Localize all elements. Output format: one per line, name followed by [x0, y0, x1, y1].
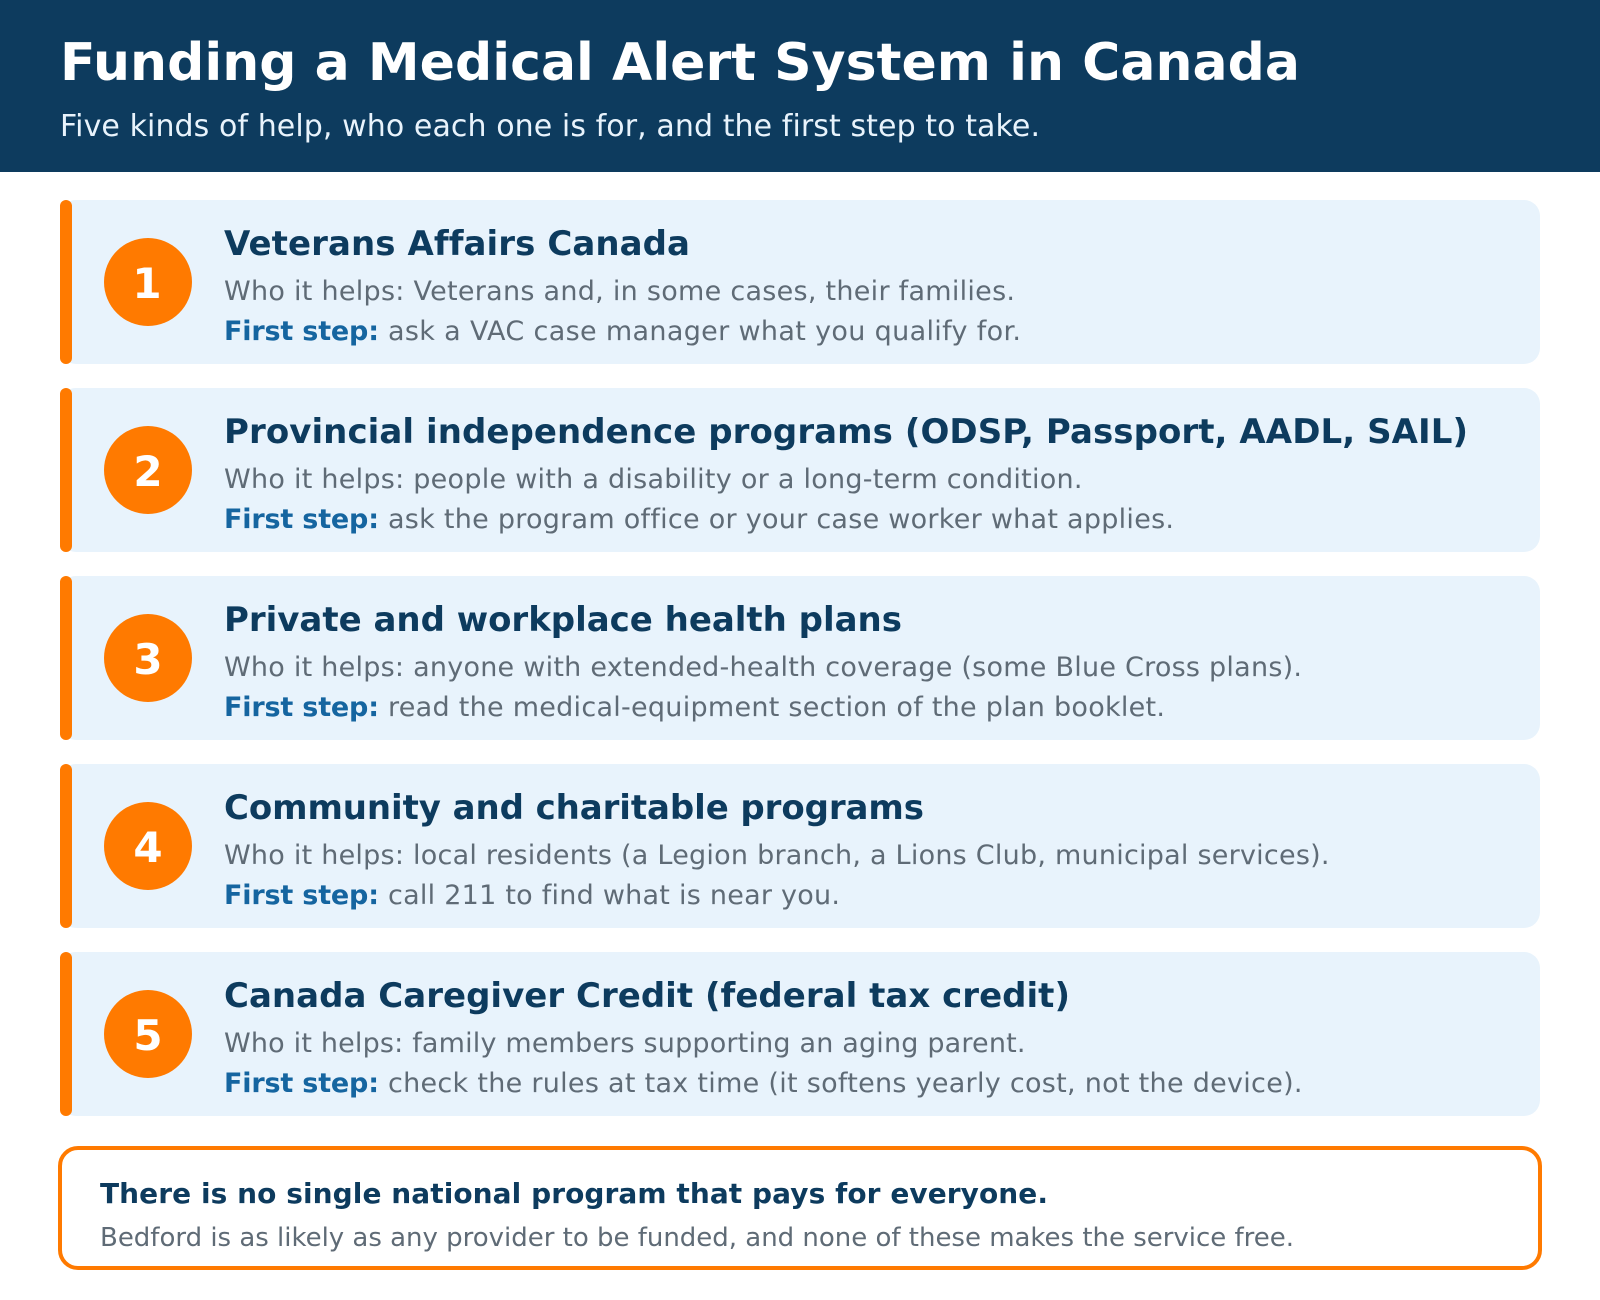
- panel: Community and charitable programs: [60, 764, 1540, 928]
- callout text: Bedford is as likely as any provider to be funded, and none of these makes the service free.: [100, 1223, 1294, 1253]
- panel: Private and workplace health plans: [60, 576, 1540, 740]
- icon: number 1 badge: [104, 238, 192, 326]
- icon: number 2 badge: [104, 426, 192, 514]
- text: first step: First step:: [224, 692, 379, 723]
- icon: number 3 badge: 3: [133, 635, 163, 684]
- text: first step: read the medical-equipment section of the plan booklet.: [388, 692, 1165, 723]
- icon: number 1 badge: 1: [132, 259, 162, 308]
- icon: number 4 badge: 4: [133, 823, 163, 872]
- panel: Provincial independence programs: [60, 388, 1540, 552]
- panel: Canada Caregiver Credit: [60, 952, 1540, 1116]
- text: first step: call 211 to find what is near you.: [388, 880, 840, 911]
- icon: number 5 badge: 5: [133, 1011, 163, 1060]
- callout: [60, 1148, 1540, 1268]
- text: first step: First step:: [224, 1068, 379, 1099]
- text: who it helps: Who it helps: Veterans and, in some cases, their families.: [224, 276, 1015, 307]
- title: Funding a Medical Alert System in Canada: [60, 33, 1300, 93]
- text: first step: First step:: [224, 316, 379, 347]
- heading: Canada Caregiver Credit: Canada Caregiver Credit (federal tax credit): [224, 976, 1070, 1016]
- text: first step: First step:: [224, 880, 379, 911]
- subtitle: Five kinds of help, who each one is for, and the first step to take.: [60, 109, 1040, 144]
- text: first step: ask the program office or your case worker what applies.: [388, 504, 1174, 535]
- text: first step: First step:: [224, 504, 379, 535]
- header banner: [0, 0, 1600, 172]
- heading: Veterans Affairs Canada: Veterans Affairs Canada: [224, 224, 690, 264]
- text: who it helps: Who it helps: family members supporting an aging parent.: [224, 1028, 1026, 1059]
- text: who it helps: Who it helps: people with a disability or a long-term condition.: [224, 464, 1082, 495]
- icon: number 4 badge: [104, 802, 192, 890]
- heading: Provincial independence programs: Provincial independence programs (ODSP, Passport, AADL, SAIL): [224, 412, 1468, 452]
- icon: number 5 badge: [104, 990, 192, 1078]
- text: first step: ask a VAC case manager what you qualify for.: [388, 316, 1021, 347]
- icon: number 2 badge: 2: [133, 447, 163, 496]
- panel: Veterans Affairs Canada: [60, 200, 1540, 364]
- icon: number 3 badge: [104, 614, 192, 702]
- text: first step: check the rules at tax time (it softens yearly cost, not the device).: [388, 1068, 1302, 1099]
- callout heading: There is no single national program that pays for everyone.: [100, 1177, 1048, 1210]
- text: who it helps: Who it helps: anyone with extended-health coverage (some Blue Cross plans).: [224, 652, 1302, 683]
- text: who it helps: Who it helps: local residents (a Legion branch, a Lions Club, municipal services).: [224, 840, 1330, 871]
- heading: Private and workplace health plans: Private and workplace health plans: [224, 600, 902, 640]
- heading: Community and charitable programs: Community and charitable programs: [224, 788, 924, 828]
